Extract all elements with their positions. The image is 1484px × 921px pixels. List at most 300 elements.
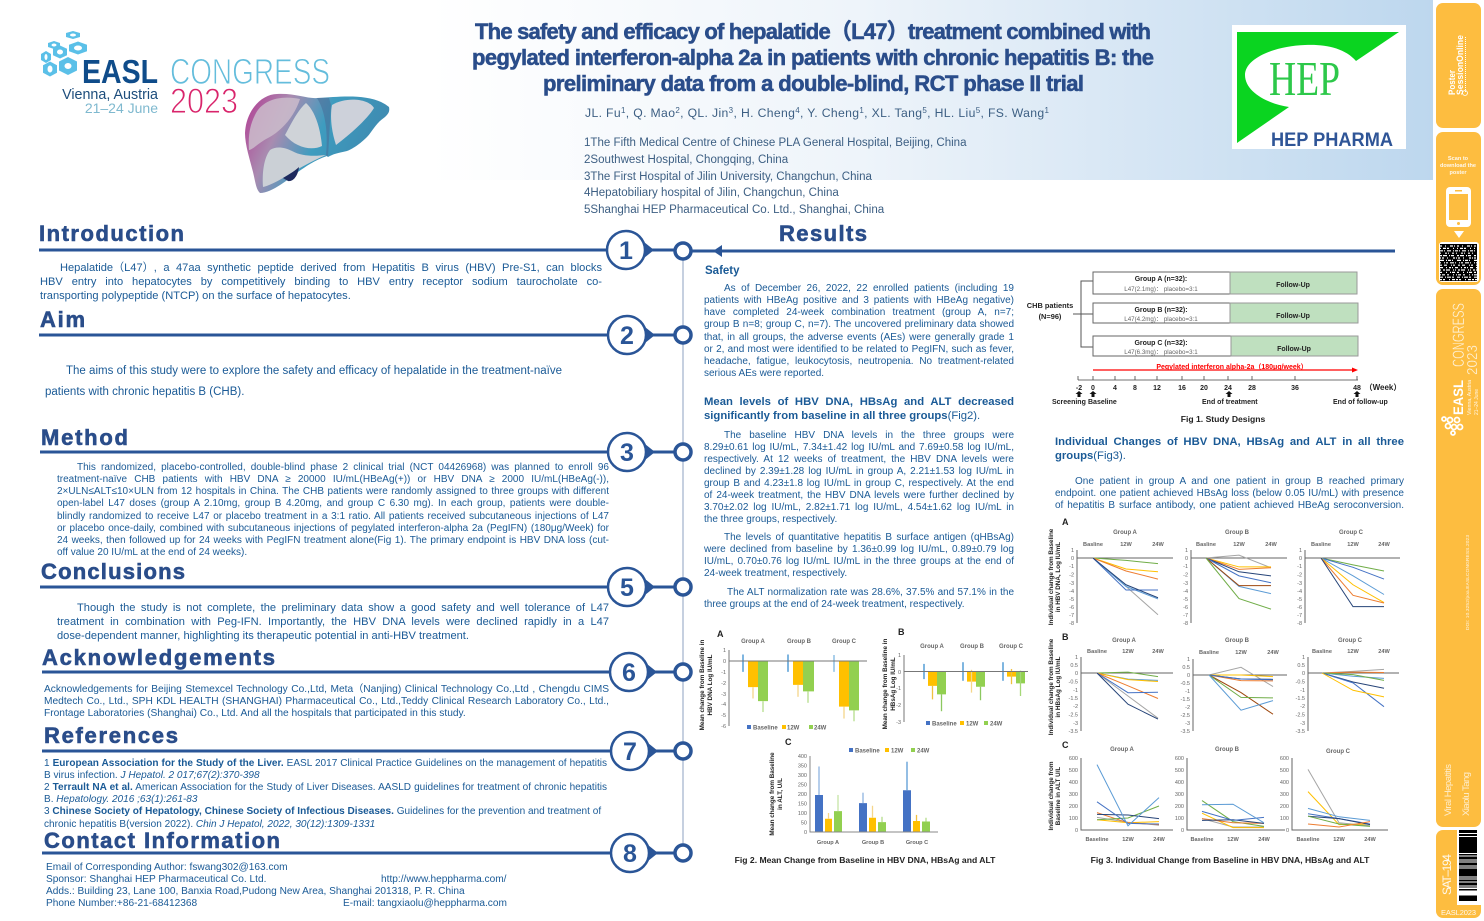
group A arm: Follow-Up	[1276, 282, 1310, 289]
text: ALT results: three groups at the end of 24-week treatment, respectively.	[704, 599, 965, 610]
icon: green swoosh	[1237, 32, 1399, 143]
heading: individual changes	[1055, 436, 1404, 462]
figure 2 panel C: ALT bar chart: 12W	[891, 748, 904, 754]
chart: group C ALT	[1280, 756, 1388, 834]
text: HBV DNA results	[704, 430, 1014, 525]
text: conclusions	[57, 602, 609, 642]
text: HBsAg results	[704, 532, 1014, 579]
abstract number: SAT–194	[1440, 854, 1454, 895]
chart: group A HBsAg: -1	[1073, 688, 1078, 694]
text: HBV DNA results: 8.29±0.61 log IU/mL, 7.34±1.42 log IU/mL and 7.69±0.58 log IU/mL,	[704, 442, 1014, 453]
text: acknowledgements: Frontage Laboratories (Shanghai) Co., Ltd. And all the hospitals that participated in this study.	[44, 708, 466, 719]
authors: , XL. Tang	[864, 106, 922, 120]
text: method: open-label L47 doses (group A 2.10mg, group B 4.20mg, and group C 6.30 mg). In each group, patients were double-	[57, 498, 609, 509]
text: references: B. Hepatology. 2016 ;63(1):261-83	[44, 794, 197, 805]
chart: group A HBV DNA: -3	[1069, 581, 1074, 587]
chart: group C HBV DNA: 0	[1299, 556, 1302, 562]
week axis	[1052, 376, 1401, 406]
chart: group C HBsAg: -1	[1300, 688, 1305, 694]
chart: group A HBV DNA: -8	[1069, 621, 1074, 627]
chart: group A HBsAg: -2.5	[1069, 712, 1078, 718]
chart: group B ALT: 600	[1175, 756, 1184, 762]
chart: group B HBV DNA: -7	[1183, 613, 1188, 619]
chart: group B HBV DNA: -2	[1183, 572, 1188, 578]
chart: group A HBsAg: 0.5	[1070, 663, 1078, 669]
week axis: 48	[1353, 385, 1361, 392]
figure 3 row C: ALT individual lines: Group B	[1215, 747, 1240, 753]
text: HBV DNA results: of 24-week treatment, the HBV DNA levels were further declined by	[704, 490, 1014, 501]
figure 2 panel C: ALT bar chart: 250	[798, 782, 807, 788]
authors: , Q. Mao	[626, 106, 675, 120]
step marker 2: 2	[620, 322, 634, 350]
figure 3 row C: ALT individual lines: 12W	[1333, 837, 1345, 843]
text: HBsAg results: were declined from baseline by 1.36±0.99 log IU/mL, 0.89±0.79 log	[704, 544, 1014, 555]
chart: group A HBsAg: -3	[1073, 721, 1078, 727]
figure 2 panel B: HBsAg bar chart: 12W	[966, 722, 979, 728]
text: HBV DNA results: the three groups, respectively.	[704, 514, 837, 525]
text: references: chronic hepatitis B(version 2022). Chin J Hepatol, 2022, 30(12):1309-1331	[44, 819, 375, 830]
chart: group B HBsAg: -2.5	[1181, 713, 1190, 719]
chart: group B HBsAg: -2	[1185, 705, 1190, 711]
figure 3 row A: HBV DNA individual lines: Group A	[1113, 530, 1138, 536]
chart: group B ALT: 200	[1175, 804, 1184, 810]
2023 year: 2023	[170, 82, 238, 121]
chart: group C HBV DNA: -3	[1297, 581, 1302, 587]
figure 2 panel A: HBV DNA bar chart: -6	[721, 724, 726, 730]
EASL2023 tag: EASL2023	[1441, 908, 1476, 917]
heading: Introduction: Introduction	[39, 221, 184, 246]
chart: group A HBsAg: 0	[1075, 671, 1078, 677]
text: method: or placebo once-daily, combined with subcutaneous injections of pegylated interferon-alpha 2a (PegIFN) (180μg/Week) for	[57, 523, 609, 534]
chart: group A ALT: 600	[1069, 756, 1078, 762]
week axis: 36	[1291, 385, 1299, 392]
text: HBsAg results: IU/mL, 0.70±0.76 log IU/mL IU/mL in the three groups at the end of	[704, 556, 1014, 567]
header gradient band	[0, 0, 1433, 180]
figure 2 panel C: ALT bar chart: Group B	[862, 840, 884, 846]
text: method: This randomized, placebo-controlled, double-blind phase 2 clinical trial (NCT 04426968) was planned to enroll 96	[77, 462, 609, 473]
figure 2 panel A: HBV DNA bar chart: -1	[721, 670, 726, 676]
figure 2 panel C: ALT bar chart: 300	[798, 773, 807, 779]
arrow: pegylated interferon period	[1093, 363, 1358, 372]
figure 3 row A: HBV DNA individual lines: Basline	[1196, 542, 1216, 548]
figure 2 panel B: HBsAg bar chart: Group C	[999, 644, 1024, 650]
chart: group C HBsAg: -3.5	[1296, 729, 1305, 735]
week axis: 4	[1113, 385, 1117, 392]
figure 3 row A: HBV DNA individual lines: 12W	[1120, 542, 1132, 548]
text: aim	[45, 365, 562, 398]
text: conclusions: treatment in combination with Peg-IFN. Importantly, the HBV DNA levels were declined rapidly in a L47	[57, 616, 609, 628]
text: HBsAg results: The levels of quantitative hepatitis B surface antigen (qHBsAg)	[724, 532, 1014, 543]
step marker 5	[608, 568, 691, 606]
heading: Aim: Aim	[40, 307, 85, 332]
group A arm	[1093, 272, 1357, 294]
text: references: 1 European Association for the Study of the Liver. EASL 2017 Clinical Practice Guidelines on the management of hepatitis	[44, 758, 607, 768]
figure 3 row C: ALT individual lines: 24W	[1258, 837, 1270, 843]
figure 2 panel A: HBV DNA bar chart: -3	[721, 692, 726, 698]
week axis: 28	[1248, 385, 1256, 392]
step marker 5: 5	[620, 574, 634, 602]
chart: group C HBsAg	[1296, 655, 1399, 735]
chart: group C HBsAg: 1	[1302, 655, 1305, 661]
figure 3 row B: HBsAg individual lines: Group B	[1225, 638, 1250, 644]
text: safety results: or 2, and most were identified to be related to PegIFN, such as fever,	[704, 344, 1014, 355]
figure 2 panel A: HBV DNA bar chart: A	[717, 629, 724, 639]
chart: group A HBV DNA: -7	[1069, 613, 1074, 619]
week axis: 24	[1224, 385, 1232, 392]
chart: group C HBsAg: -3	[1300, 721, 1305, 727]
chart: group A HBsAg	[1069, 655, 1173, 735]
week axis: 8	[1133, 385, 1137, 392]
affiliations: 5Shanghai HEP Pharmaceutical Co. Ltd., Shanghai, China	[584, 204, 885, 216]
text: individual change results: One patient in group A and one patient in group B reached primary	[1075, 476, 1404, 487]
chart: group A HBV DNA: -4	[1069, 589, 1074, 595]
text: acknowledgements	[44, 683, 609, 719]
group B arm: Follow-Up	[1276, 313, 1310, 320]
chart: group B HBV DNA	[1183, 548, 1287, 627]
authors: , FS. Wang	[981, 106, 1044, 120]
figure 2 panel A: HBV DNA bar chart: Baseline	[753, 726, 778, 732]
chart: group C HBsAg: -2.5	[1296, 712, 1305, 718]
week axis: End of treatment	[1202, 399, 1258, 406]
figure 2 panel B: HBsAg bar chart: -3	[896, 720, 901, 726]
text: introduction: a 47aa synthetic peptide derived from Hepatitis B virus (HBV) Pre-S1, can blocks	[163, 262, 602, 274]
text: introduction: transporting polypeptide (NTCP) on the surface of hepatocytes.	[40, 290, 351, 302]
chart: group B ALT	[1175, 756, 1285, 834]
DOI text: DOI: 10.3252/poa.EASLCONGRESS.2023	[1465, 535, 1471, 630]
icon: down triangle	[1454, 231, 1464, 238]
step marker 1	[607, 231, 691, 269]
chart: group B HBV DNA: 0	[1185, 556, 1188, 562]
text: safety results: headache, fatigue, leukocytosis, neutropenia. No treatment-related	[704, 356, 1014, 367]
week axis: 20	[1200, 385, 1208, 392]
figure 3 row B: HBsAg individual lines: 24W	[1152, 649, 1164, 655]
figure 3 row B: HBsAg individual lines: 12W	[1347, 649, 1359, 655]
figure 2 panel A: HBV DNA bar chart: Group C	[832, 639, 857, 645]
group C arm	[1093, 336, 1358, 356]
affiliations: 2Southwest Hospital, Chongqing, China	[584, 154, 789, 166]
figure 3 row C: ALT individual lines: 24W	[1364, 837, 1376, 843]
text: HBV DNA results: The baseline HBV DNA levels in the three groups were	[724, 430, 1014, 441]
figure 2 panel B: HBsAg bar chart: 24W	[990, 722, 1003, 728]
figure 2 panel B: HBsAg bar chart: Group B	[960, 644, 985, 650]
figure 3 row C: ALT individual lines: Baseline	[1085, 837, 1109, 843]
authors: , Y. Cheng	[800, 106, 859, 120]
chart: group B HBsAg: -1	[1185, 689, 1190, 695]
location and dates	[62, 87, 158, 116]
sidebar: poster session online tab	[1436, 3, 1481, 128]
figure 3 row A: HBV DNA individual lines: Group C	[1339, 530, 1364, 536]
chart: group C HBV DNA: -2	[1297, 572, 1302, 578]
text: introduction: Hepalatide（L47）,	[60, 262, 157, 274]
text: contact information: Sponsor: Shanghai HEP Pharmaceutical Co. Ltd.	[46, 874, 266, 885]
sidebar: poster session online tab: Poster	[1447, 70, 1457, 95]
chart: group C HBV DNA: 1	[1299, 548, 1302, 554]
chart: group C HBsAg: -1.5	[1296, 696, 1305, 702]
chart: group A HBV DNA: -2	[1069, 572, 1074, 578]
figure 3 row B: HBsAg individual lines: Group A	[1112, 638, 1137, 644]
week axis: End of follow-up	[1333, 399, 1388, 406]
sidebar location text: Vienna, Austria	[1467, 379, 1473, 415]
chart: group B HBV DNA: -5	[1183, 597, 1188, 603]
step marker 7: 7	[623, 738, 637, 766]
chart: group B HBsAg: -0.5	[1181, 681, 1190, 687]
text: acknowledgements: Medtech Co., Ltd., SPH KDL HEALTH (SHANGHAI) Pharmaceutical Co., Ltd.,Teddy Clinical Research Laboratory Co., Ltd.,	[44, 696, 609, 707]
heading: safety: Safety	[705, 265, 740, 277]
figure 3 row A: HBV DNA individual lines: Basline	[1311, 542, 1331, 548]
section timeline	[39, 231, 1395, 872]
chart: group A HBsAg: -3.5	[1069, 729, 1078, 735]
authors: JL. Fu	[585, 106, 621, 120]
CONGRESS wordmark: CONGRESS	[170, 51, 330, 92]
text: references: 3 Chinese Society of Hepatology, Chinese Society of Infectious Diseases. Guidelines for the prevention and treatment of	[44, 806, 601, 817]
figure 3 row A: HBV DNA individual lines: A	[1062, 517, 1069, 527]
figure 2 panel C: ALT bar chart: 400	[798, 754, 807, 760]
figure 2 panel B: HBsAg bar chart: -1	[896, 686, 901, 692]
chart: group B HBsAg: 0	[1187, 673, 1190, 679]
figure 3 row C: ALT individual lines: Group C	[1326, 749, 1351, 755]
chart: group A ALT: 0	[1075, 828, 1078, 834]
chart: group C HBsAg: -0.5	[1296, 680, 1305, 686]
figure 2 panel B: HBsAg bar chart: Baseline	[932, 722, 957, 728]
text: ALT results	[704, 587, 1014, 610]
text: individual change results: of hepatitis B surface antibody, one patient achieved HBeAg seroconversion.	[1055, 500, 1404, 511]
affiliations: 3The First Hospital of Jilin University, Changchun, China	[584, 171, 873, 183]
step marker 6: 6	[622, 659, 636, 687]
figure 2 panel A: HBV DNA bar chart: HBV DNA Log IU/mL	[707, 654, 714, 715]
location and dates: Vienna, Austria	[62, 87, 158, 103]
chart: group C ALT: 500	[1280, 768, 1289, 774]
figure 2 panel A: HBV DNA bar chart: 1	[723, 648, 726, 654]
sidebar: abstract number and barcode	[1436, 830, 1481, 918]
text: contact information: http://www.heppharma.com/	[381, 874, 506, 885]
text: introduction: HBV entry into hepatocytes by competitively binding to HBV entry receptor sodium taurocholate co-	[40, 276, 602, 288]
authors: 5	[976, 106, 981, 115]
figure 2 panel A: HBV DNA bar chart	[699, 629, 867, 732]
authors: , HL. Liu	[927, 106, 975, 120]
group A arm: Group A (n=32):	[1135, 276, 1187, 283]
authors: 3	[729, 106, 734, 115]
icon: sidebar hexagons	[1442, 417, 1462, 435]
patient label: (N=96)	[1039, 312, 1062, 321]
chart: group C HBV DNA: -4	[1297, 589, 1302, 595]
step marker 3	[608, 433, 691, 471]
chart: group B ALT: 0	[1181, 828, 1184, 834]
group B arm	[1093, 303, 1358, 323]
chart: group A HBV DNA: -6	[1069, 605, 1074, 611]
figure 2 panel C: ALT bar chart: Group A	[817, 840, 839, 846]
figure 2 panel A: HBV DNA bar chart: 12W	[787, 726, 800, 732]
chart: group A ALT	[1069, 756, 1173, 834]
sidebar 2023 text: 2023	[1464, 345, 1481, 375]
figure 2 panel A: HBV DNA bar chart: -5	[721, 713, 726, 719]
EASL wordmark: EASL	[82, 53, 158, 90]
text: contact information	[46, 862, 507, 909]
chart: group C HBV DNA: -1	[1297, 564, 1302, 570]
group C arm: Follow-Up	[1277, 346, 1311, 353]
arrow: results pointer	[713, 245, 722, 257]
chart: group B HBV DNA: -8	[1183, 621, 1188, 627]
figure 2 panel C: ALT bar chart: 200	[798, 792, 807, 798]
text: references: 2 Terrault NA et al. American Association for the Study of Liver Diseases. AASLD guidelines for treatment of chronic hepatitis	[44, 782, 607, 793]
text: references	[44, 758, 607, 830]
figure 3 row C: ALT individual lines: Baseline	[1296, 837, 1320, 843]
chart: group B HBV DNA: -6	[1183, 605, 1188, 611]
text: safety results: that, in all groups, the adverse events (AEs) were generally grade 1	[704, 332, 1014, 343]
figure 3 row B: HBsAg individual lines: Basline	[1312, 649, 1332, 655]
patient label	[1027, 301, 1073, 321]
figure 2 panel C: ALT bar chart: 100	[798, 811, 807, 817]
text: method: off value 20 IU/mL at the end of 24 weeks).	[57, 547, 247, 558]
text: acknowledgements: Acknowledgements for Beijing Stemexcel Technology Co.,Ltd, Clinical Technology Co.,Ltd , Chengdu CIMS	[44, 684, 609, 695]
text: safety results: have completed 24-week combination treatment (group A, n=7;	[704, 307, 1014, 318]
week axis: 12	[1153, 385, 1161, 392]
figure 3 row C: ALT individual lines	[1048, 740, 1388, 843]
text: references: B virus infection. J Hepatol. 2 017;67(2):370-398	[44, 770, 260, 781]
chart: group B ALT: 100	[1175, 816, 1184, 822]
heading: mean levels: significantly from baseline in all three groups(Fig2).	[704, 410, 980, 422]
heading: Acknowledgements: Acknowledgements	[42, 645, 275, 670]
chart: group C HBsAg: 0.5	[1297, 663, 1305, 669]
figure 2 panel C: ALT bar chart: C	[785, 737, 792, 747]
text: method: 2×ULN≤ALT≤10×ULN from 12 hospitals in China. The CHB patients were randomly assigned to three groups with different	[57, 486, 609, 497]
figure 2 panel C: ALT bar chart: Mean change from Baseline	[769, 752, 776, 836]
authors: , H. Cheng	[733, 106, 795, 120]
text: method: treatment-naïve CHB patients with HBV DNA ≥ 20000 IU/mL(HBeAg(+)) or HBV DNA ≥ 2000 IU/mL(HBeAg(-)),	[57, 474, 609, 485]
figure 3 row C: ALT individual lines: C	[1062, 740, 1069, 750]
chart: group A HBV DNA: -5	[1069, 597, 1074, 603]
chart: group B HBsAg: -3.5	[1181, 729, 1190, 735]
chart: group C HBV DNA: -6	[1297, 605, 1302, 611]
figure 3 row B: HBsAg individual lines	[1048, 632, 1399, 735]
figure 2 panel B: HBsAg bar chart: Group A	[920, 644, 945, 650]
figure 2 panel C: ALT bar chart: 24W	[917, 748, 930, 754]
figure 3 row B: HBsAg individual lines: Basline	[1199, 650, 1219, 656]
chart: group A ALT: 500	[1069, 768, 1078, 774]
sidebar EASL text: EASL	[1450, 380, 1466, 415]
icon: phone	[1446, 187, 1471, 227]
week axis: Screening	[1052, 399, 1086, 406]
text: conclusions: Though the study is not complete, the preliminary data show a good safety and well tolerance of L47	[77, 602, 609, 614]
figure 3 row B: HBsAg individual lines: Group C	[1338, 638, 1363, 644]
affiliations: 4Hepatobiliary hospital of Jilin, Changchun, China	[584, 187, 839, 199]
group C arm: Group C (n=32):	[1134, 340, 1188, 347]
figure 2 panel A: HBV DNA bar chart: 0	[723, 659, 726, 665]
chart: group C HBsAg: -2	[1300, 704, 1305, 710]
week axis: 16	[1178, 385, 1186, 392]
step marker 8: 8	[623, 840, 637, 868]
HEP letters: HEP	[1269, 51, 1340, 106]
heading: Conclusions: Conclusions	[41, 559, 185, 584]
authors: , QL. Jin	[680, 106, 728, 120]
authors: 1	[1045, 106, 1050, 115]
chart: group B HBV DNA: 1	[1185, 548, 1188, 554]
figure 2 panel B: HBsAg bar chart: HBsAg Log IU/mL	[890, 657, 897, 711]
QR code	[1439, 242, 1479, 282]
chart: group B ALT: 500	[1175, 768, 1184, 774]
figure 2 panel A: HBV DNA bar chart: 24W	[814, 726, 827, 732]
chart: group A HBV DNA	[1069, 548, 1173, 627]
chart: group B HBsAg: -3	[1185, 721, 1190, 727]
HEP PHARMA wordmark: HEP PHARMA	[1271, 129, 1393, 151]
title	[472, 19, 1154, 96]
week axis: Baseline	[1088, 399, 1117, 406]
authors: 4	[795, 106, 800, 115]
heading: individual changes: groups(Fig3).	[1055, 450, 1126, 462]
figure 2 panel C: ALT bar chart: 150	[798, 802, 807, 808]
figure 2 panel B: HBsAg bar chart: -2	[896, 703, 901, 709]
text: contact information: Adds.: Building 23, Lane 100, Banxia Road,Pudong New Area, Shanghai 201318, P. R. China	[46, 886, 465, 897]
icon: EASL hexagon cluster	[41, 31, 87, 76]
title: preliminary data from a double-blind, RCT phase II trial	[543, 71, 1084, 96]
logo: HEP Pharma	[1232, 25, 1406, 151]
chart: group C ALT: 200	[1280, 804, 1289, 810]
week axis: （Week）	[1365, 383, 1401, 392]
step marker 8	[611, 834, 691, 872]
week axis: -2	[1076, 385, 1082, 392]
group C arm: L47(6.3mg)： placebo=3:1	[1124, 349, 1198, 356]
icon: liver illustration	[245, 94, 389, 193]
figure 3 row B: HBsAg individual lines: 12W	[1122, 649, 1134, 655]
figure 3 row B: HBsAg individual lines: Basline	[1087, 649, 1107, 655]
figure 3 row C: ALT individual lines: Baseline	[1190, 837, 1214, 843]
figure 2 panel B: HBsAg bar chart: 1	[898, 653, 901, 659]
figure 2 panel C: ALT bar chart	[769, 737, 938, 846]
figure 2 panel B: HBsAg bar chart: 0	[898, 670, 901, 676]
text: safety results: patients with HBeAg positive and 3 patients with HBeAg negative)	[704, 295, 1014, 306]
text: individual change results: endpoint. one patient achieved HBsAg loss (below 0.05 IU/mL) with presence	[1055, 488, 1404, 499]
step marker 6	[610, 653, 691, 691]
figure 3 row B: HBsAg individual lines: 24W	[1267, 650, 1279, 656]
text: method	[57, 462, 609, 558]
figure 3 row A: HBV DNA individual lines: 24W	[1152, 542, 1164, 548]
text: contact information: Phone Number:+86-21-68412368	[46, 898, 197, 909]
chart: group B HBsAg	[1181, 657, 1287, 735]
figure 3 row A: HBV DNA individual lines: in HBV DNA, Log IU/mL	[1055, 542, 1062, 612]
title: pegylated interferon-alpha 2a in patients with chronic hepatitis B: the	[472, 45, 1154, 70]
text: HBsAg results: 24-week treatment, respectively.	[704, 568, 847, 579]
chart: group C HBsAg: 0	[1302, 671, 1305, 677]
week axis: 0	[1091, 385, 1095, 392]
figure 2 panel A: HBV DNA bar chart: -2	[721, 681, 726, 687]
heading: Contact Information: Contact Information	[44, 828, 280, 853]
figure 3 row C: ALT individual lines: 12W	[1227, 837, 1239, 843]
presenter name: Xiaolu Tang	[1461, 772, 1472, 816]
figure 3 row C: ALT individual lines: 24W	[1153, 837, 1165, 843]
figure 2 panel A: HBV DNA bar chart: -4	[721, 702, 726, 708]
text: safety results: group B n=8; group C, n=7). The uncovered preliminary data showed	[704, 319, 1014, 330]
figure 2 panel C: ALT bar chart: in ALT, U/L	[777, 778, 784, 810]
figure 1: study design diagram	[1027, 272, 1401, 424]
text: introduction	[40, 262, 602, 302]
authors: 2	[675, 106, 680, 115]
sidebar: congress info tab	[1436, 289, 1481, 827]
barcode	[1459, 830, 1477, 901]
figure 3 row B: HBsAg individual lines: B	[1062, 632, 1069, 642]
chart: group B HBV DNA: -3	[1183, 581, 1188, 587]
step marker 2	[608, 316, 691, 354]
heading: mean levels: Mean levels of HBV DNA, HBsAg and ALT decreased	[704, 396, 1014, 408]
figure 3 row A: HBV DNA individual lines: Individual change from Baseline	[1048, 528, 1055, 625]
chart: group A HBV DNA: 1	[1071, 548, 1074, 554]
heading: individual changes: Individual Changes of HBV DNA, HBsAg and ALT in all three	[1055, 436, 1404, 448]
figure 1 caption: Fig 1. Study Designs	[1181, 414, 1265, 424]
figure 3 row B: HBsAg individual lines: in HBsAg Log IU/mL	[1055, 656, 1062, 717]
text: safety results: serious AEs were reported.	[704, 368, 824, 379]
patient label: CHB patients	[1027, 301, 1073, 310]
sidebar date text: 21–24 June	[1474, 389, 1480, 415]
figure 2 panel A: HBV DNA bar chart: Mean change from Baseline in	[699, 640, 706, 730]
step marker 3: 3	[620, 439, 634, 467]
